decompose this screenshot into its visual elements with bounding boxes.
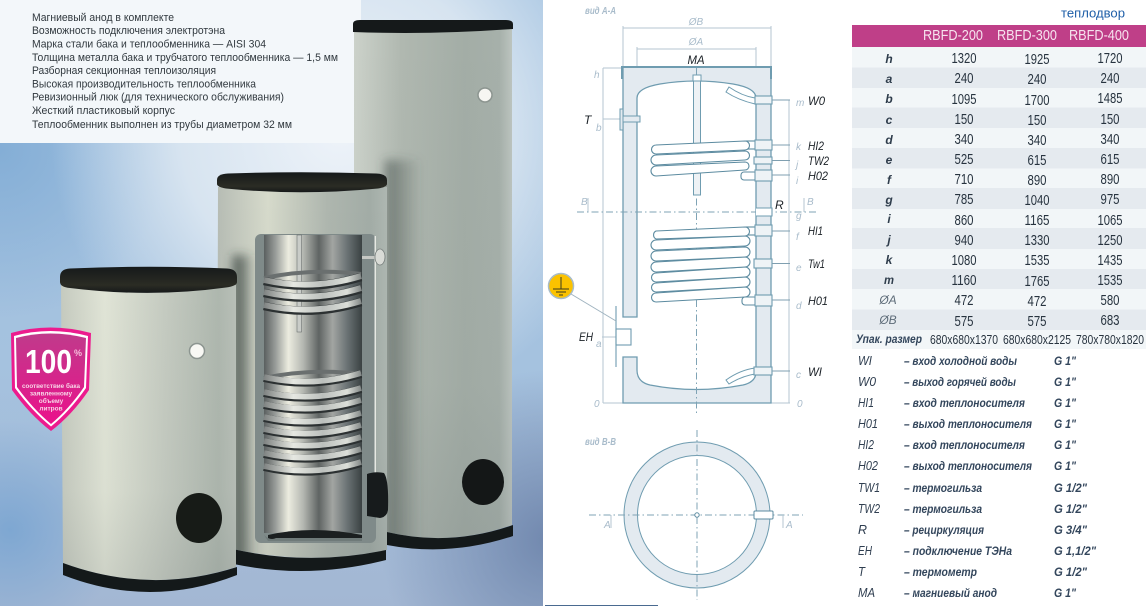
dimension letters: k [796, 142, 802, 153]
feature list panel: Теплообменник выполнен из трубы диаметром 32 мм [32, 119, 292, 131]
dimension letters: h [594, 70, 600, 81]
legend TW1 [858, 481, 1088, 495]
row package size [856, 333, 1144, 347]
row c: 150 [1028, 113, 1046, 129]
section drawing B-B: A [785, 520, 793, 531]
row d: 340 [954, 132, 974, 148]
feature list panel: Магниевый анод в комплекте [32, 12, 174, 24]
legend TW2 [858, 502, 1088, 516]
row b: 1095 [952, 92, 976, 108]
row diameter B: 683 [1100, 313, 1120, 329]
row f: 890 [1028, 173, 1046, 189]
dimension letters: f [796, 232, 800, 243]
row h: 1720 [1098, 51, 1122, 67]
row k [886, 253, 1122, 269]
small tank [60, 267, 237, 592]
legend HO2: – выход теплоносителя [904, 461, 1032, 473]
tank wall [623, 67, 771, 403]
feature list panel: Высокая производительность теплообменника [32, 78, 257, 90]
row h: 1320 [952, 51, 976, 67]
row e: 525 [954, 152, 974, 168]
row i: 1165 [1024, 213, 1050, 229]
row b: 1485 [1098, 91, 1122, 107]
lower coil [264, 372, 361, 472]
badge: 100%: литров [39, 406, 63, 412]
nozzle leader lines [772, 100, 790, 371]
row diameter A: 472 [1028, 294, 1046, 310]
row stripes [852, 47, 1146, 349]
view label A-A: вид А-А [585, 6, 616, 17]
legend T [858, 565, 1088, 579]
dimension letters: e [796, 263, 802, 274]
row c: 150 [1100, 112, 1120, 128]
row k: 1535 [1024, 253, 1050, 269]
row k: 1080 [952, 253, 976, 269]
row k: 1435 [1098, 253, 1122, 269]
row f: 890 [1100, 172, 1120, 188]
legend HI1: G 1" [1054, 398, 1076, 410]
dimension letters: b [596, 123, 602, 134]
row d: d [885, 133, 893, 147]
legend HO2 [858, 459, 1076, 473]
photo background [0, 0, 543, 606]
row g: 785 [954, 192, 974, 208]
row i: 860 [954, 213, 974, 229]
dimension letters [581, 17, 814, 410]
row diameter A: 472 [954, 293, 974, 309]
badge: 100%: объему [39, 397, 64, 405]
legend WO: G 1" [1054, 377, 1076, 389]
row i: 1065 [1098, 213, 1122, 229]
row h [885, 51, 1122, 68]
row diameter A: 580 [1100, 293, 1120, 309]
inlet and outlet pipes [726, 87, 755, 384]
upper heat exchanger [651, 141, 757, 180]
row b: 1700 [1024, 93, 1050, 109]
centre lines [577, 68, 817, 415]
knob on small tank [190, 344, 204, 358]
legend MA: G 1" [1054, 588, 1076, 600]
row b: b [885, 92, 893, 106]
badge: 100%: 100 [25, 343, 72, 380]
feature list panel: Марка стали бака и теплообменника — AISI 304 [32, 38, 266, 50]
dimension letters: d [796, 301, 802, 312]
row diameter B: 575 [954, 314, 974, 330]
legend R: G 3/4" [1054, 525, 1088, 537]
legend T: G 1/2" [1054, 567, 1088, 579]
row m [884, 273, 1122, 290]
table header: RBFD-200 [923, 27, 983, 44]
row diameter B [878, 313, 1120, 330]
row package size: Упак. размер [856, 334, 922, 346]
connection labels: H01 [808, 294, 828, 308]
thermometer pocket [620, 109, 640, 130]
legend MA: MA [858, 586, 875, 600]
nozzles [616, 96, 772, 375]
legend HI1 [858, 396, 1076, 410]
row j: 940 [954, 233, 974, 249]
dimension letters: i [796, 176, 799, 187]
dimension letters: ØB [688, 17, 704, 28]
legend WI: – вход холодной воды [904, 356, 1017, 368]
heater flange [367, 472, 388, 518]
dimension letters: g [796, 211, 802, 222]
icon: grounding [548, 274, 616, 321]
row package size: 680x680x1370 [930, 333, 998, 347]
row diameter A [878, 293, 1120, 310]
row c [886, 112, 1120, 129]
legend TW1: G 1/2" [1054, 483, 1088, 495]
row diameter A: ØA [878, 293, 897, 307]
brand label: теплодвор [1061, 6, 1125, 20]
table header: RBFD-400 [1069, 27, 1129, 44]
legend R [858, 523, 1088, 537]
row m: 1765 [1024, 274, 1050, 290]
row diameter B: ØB [878, 313, 897, 327]
connections legend [858, 354, 1097, 600]
row f [887, 172, 1120, 189]
legend TW2: G 1/2" [1054, 504, 1088, 516]
dimension lines [588, 26, 804, 403]
badge: 100% [11, 328, 91, 431]
table header [852, 25, 1146, 47]
middle tank with cutaway [217, 172, 388, 585]
legend HO1: G 1" [1054, 419, 1076, 431]
dimension letters: m [796, 98, 804, 109]
section drawing A-A [548, 6, 829, 415]
row h: 1925 [1024, 52, 1050, 68]
badge: 100%: соответствие бака [22, 382, 80, 390]
row a: a [886, 72, 893, 86]
legend R: – рециркуляция [904, 525, 984, 537]
lower heat exchanger [651, 227, 757, 305]
connection labels: MA [688, 53, 704, 67]
row k: k [886, 253, 894, 267]
row diameter B: 575 [1028, 314, 1046, 330]
connection labels: Tw1 [808, 257, 825, 271]
row c: 150 [954, 112, 974, 128]
anode rod [297, 235, 302, 332]
legend R: R [858, 523, 867, 537]
row e [886, 152, 1120, 169]
badge: 100%: заявленному [30, 390, 72, 398]
connection labels: EH [579, 330, 593, 344]
legend HI2 [858, 438, 1076, 452]
row m: m [884, 273, 894, 287]
legend WI: WI [858, 354, 872, 368]
legend HO1: H01 [858, 417, 878, 431]
top plate [622, 67, 771, 79]
legend MA: – магниевый анод [904, 588, 997, 600]
row h: h [885, 52, 893, 66]
legend MA [858, 586, 1076, 600]
dimension letters: 0 [594, 399, 600, 410]
legend EH: G 1,1/2" [1054, 546, 1097, 558]
feature list panel: Ревизионный люк (для технического обслуживания) [32, 92, 284, 104]
legend HO1: – выход теплоносителя [904, 419, 1032, 431]
row d [885, 132, 1120, 149]
row a: 240 [954, 71, 974, 87]
legend WI [858, 354, 1076, 368]
dimension letters: c [796, 370, 801, 381]
row g [884, 192, 1120, 209]
legend EH: EH [858, 544, 873, 558]
row d: 340 [1028, 133, 1046, 149]
legend HI2: – вход теплоносителя [904, 440, 1025, 452]
row f: 710 [954, 172, 974, 188]
cutaway opening [255, 234, 376, 543]
row j [885, 233, 1122, 249]
legend TW1: TW1 [858, 481, 880, 495]
dimension letters: j [794, 160, 799, 171]
legend WI: G 1" [1054, 356, 1076, 368]
row j: 1250 [1098, 233, 1122, 249]
dimension letters: ØA [688, 37, 704, 48]
hatch on small tank [176, 493, 222, 543]
table header: RBFD-300 [997, 27, 1057, 44]
row m: 1535 [1098, 273, 1122, 289]
section drawing B-B: A [603, 520, 611, 531]
connection labels: WI [808, 365, 823, 379]
row f: f [887, 173, 892, 187]
row c: c [886, 113, 893, 127]
legend HI2: G 1" [1054, 440, 1076, 452]
row b [885, 91, 1122, 109]
dimensions table [852, 25, 1146, 349]
upper coil [264, 272, 361, 311]
dimension letters: 0 [797, 399, 803, 410]
connection labels: TW2 [808, 154, 829, 168]
connection labels: H02 [808, 169, 828, 183]
legend HI1: – вход теплоносителя [904, 398, 1025, 410]
legend WO: – выход горячей воды [904, 377, 1016, 389]
connection labels: R [775, 198, 784, 212]
feature list panel: Жесткий пластиковый корпус [32, 105, 175, 117]
dimension letters: a [596, 339, 602, 350]
thermometer [362, 249, 385, 265]
legend T: – термометр [904, 567, 977, 579]
feature list panel [0, 0, 361, 143]
row a: 240 [1028, 72, 1046, 88]
connection labels [579, 53, 829, 379]
anode [693, 75, 701, 195]
connection labels: HI1 [808, 224, 823, 238]
connection labels: W0 [808, 94, 825, 108]
legend HO2: H02 [858, 459, 878, 473]
small-tank shadow on the middle tank [233, 255, 255, 585]
hatch on tall tank [462, 459, 504, 505]
legend HI2: HI2 [858, 438, 874, 452]
feature list panel: Разборная секционная теплоизоляция [32, 65, 216, 77]
view label B-B: вид В-В [585, 437, 616, 448]
row g: g [884, 193, 893, 207]
row g: 975 [1100, 192, 1120, 208]
knob on tall tank [478, 88, 492, 102]
row e: 615 [1028, 153, 1046, 169]
tall tank [353, 20, 513, 560]
row i: i [887, 212, 891, 226]
connection labels: T [584, 113, 593, 127]
legend TW1: – термогильза [904, 483, 983, 495]
row d: 340 [1100, 132, 1120, 148]
legend HO1 [858, 417, 1076, 431]
dimension letters: B [581, 197, 588, 208]
row a [886, 71, 1120, 88]
legend TW2: TW2 [858, 502, 880, 516]
row j: 1330 [1024, 233, 1050, 249]
row j: j [885, 233, 891, 247]
row g: 1040 [1024, 193, 1050, 209]
connection labels: HI2 [808, 139, 824, 153]
section drawing B-B [585, 430, 803, 600]
legend HO2: G 1" [1054, 461, 1076, 473]
legend WO [858, 375, 1076, 389]
legend EH: – подключение ТЭНа [904, 546, 1013, 558]
ring [631, 449, 763, 581]
legend WO: W0 [858, 375, 876, 389]
feature list panel: Толщина металла бака и трубчатого теплообменника — 1,5 мм [32, 52, 338, 64]
row e: 615 [1100, 152, 1120, 168]
badge: 100%: % [74, 348, 82, 358]
legend TW2: – термогильза [904, 504, 983, 516]
legend EH [858, 544, 1097, 558]
row e: e [886, 153, 893, 167]
row m: 1160 [952, 273, 976, 289]
dimension letters: B [807, 197, 814, 208]
row a: 240 [1100, 71, 1120, 87]
row i [887, 212, 1122, 229]
legend HI1: HI1 [858, 396, 874, 410]
legend T: T [858, 565, 866, 579]
row package size: 680x680x2125 [1003, 333, 1071, 347]
feature list panel: Возможность подключения электротэна [32, 25, 226, 37]
